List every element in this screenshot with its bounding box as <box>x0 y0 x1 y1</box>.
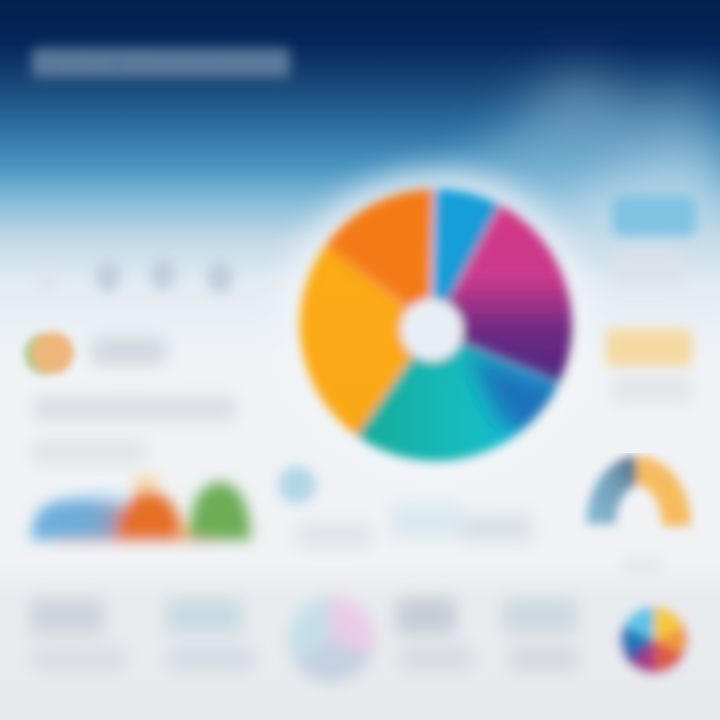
slice: magenta to purple <box>442 196 580 388</box>
right callout: orange value <box>606 329 692 367</box>
middle text right <box>390 504 532 542</box>
right callout: blue value <box>612 195 696 236</box>
bottom text block 3 <box>396 598 472 672</box>
bottom left text block 1 <box>30 598 126 672</box>
left paragraph line 1 <box>34 396 236 421</box>
left heading text <box>92 337 166 365</box>
pie hole <box>401 299 463 361</box>
slice: teal <box>349 338 561 470</box>
gauge chart <box>601 470 677 526</box>
title: Data Overview <box>32 45 291 80</box>
slice: orange <box>319 181 445 314</box>
right callout: grey text <box>612 252 684 282</box>
slice: sky blue <box>422 181 504 308</box>
slice: yellow <box>292 239 419 446</box>
left paragraph line 2 <box>32 441 146 464</box>
slice: deep blue <box>468 352 585 440</box>
middle text left <box>296 522 372 548</box>
bottom left text block 2 <box>166 598 254 672</box>
left orange badge icon <box>24 332 74 375</box>
right callout: grey caption <box>612 376 692 403</box>
middle light blue icon <box>278 466 316 504</box>
gauge caption <box>622 556 662 574</box>
small colour wheel <box>615 600 695 680</box>
pale pie chart <box>289 596 375 683</box>
main pie chart <box>292 181 580 470</box>
left wave area chart <box>32 475 251 544</box>
glow behind pie <box>280 169 592 481</box>
row of faint icons <box>36 258 233 293</box>
bottom text block 4 <box>503 598 578 672</box>
misty mountains, top right <box>420 70 720 260</box>
